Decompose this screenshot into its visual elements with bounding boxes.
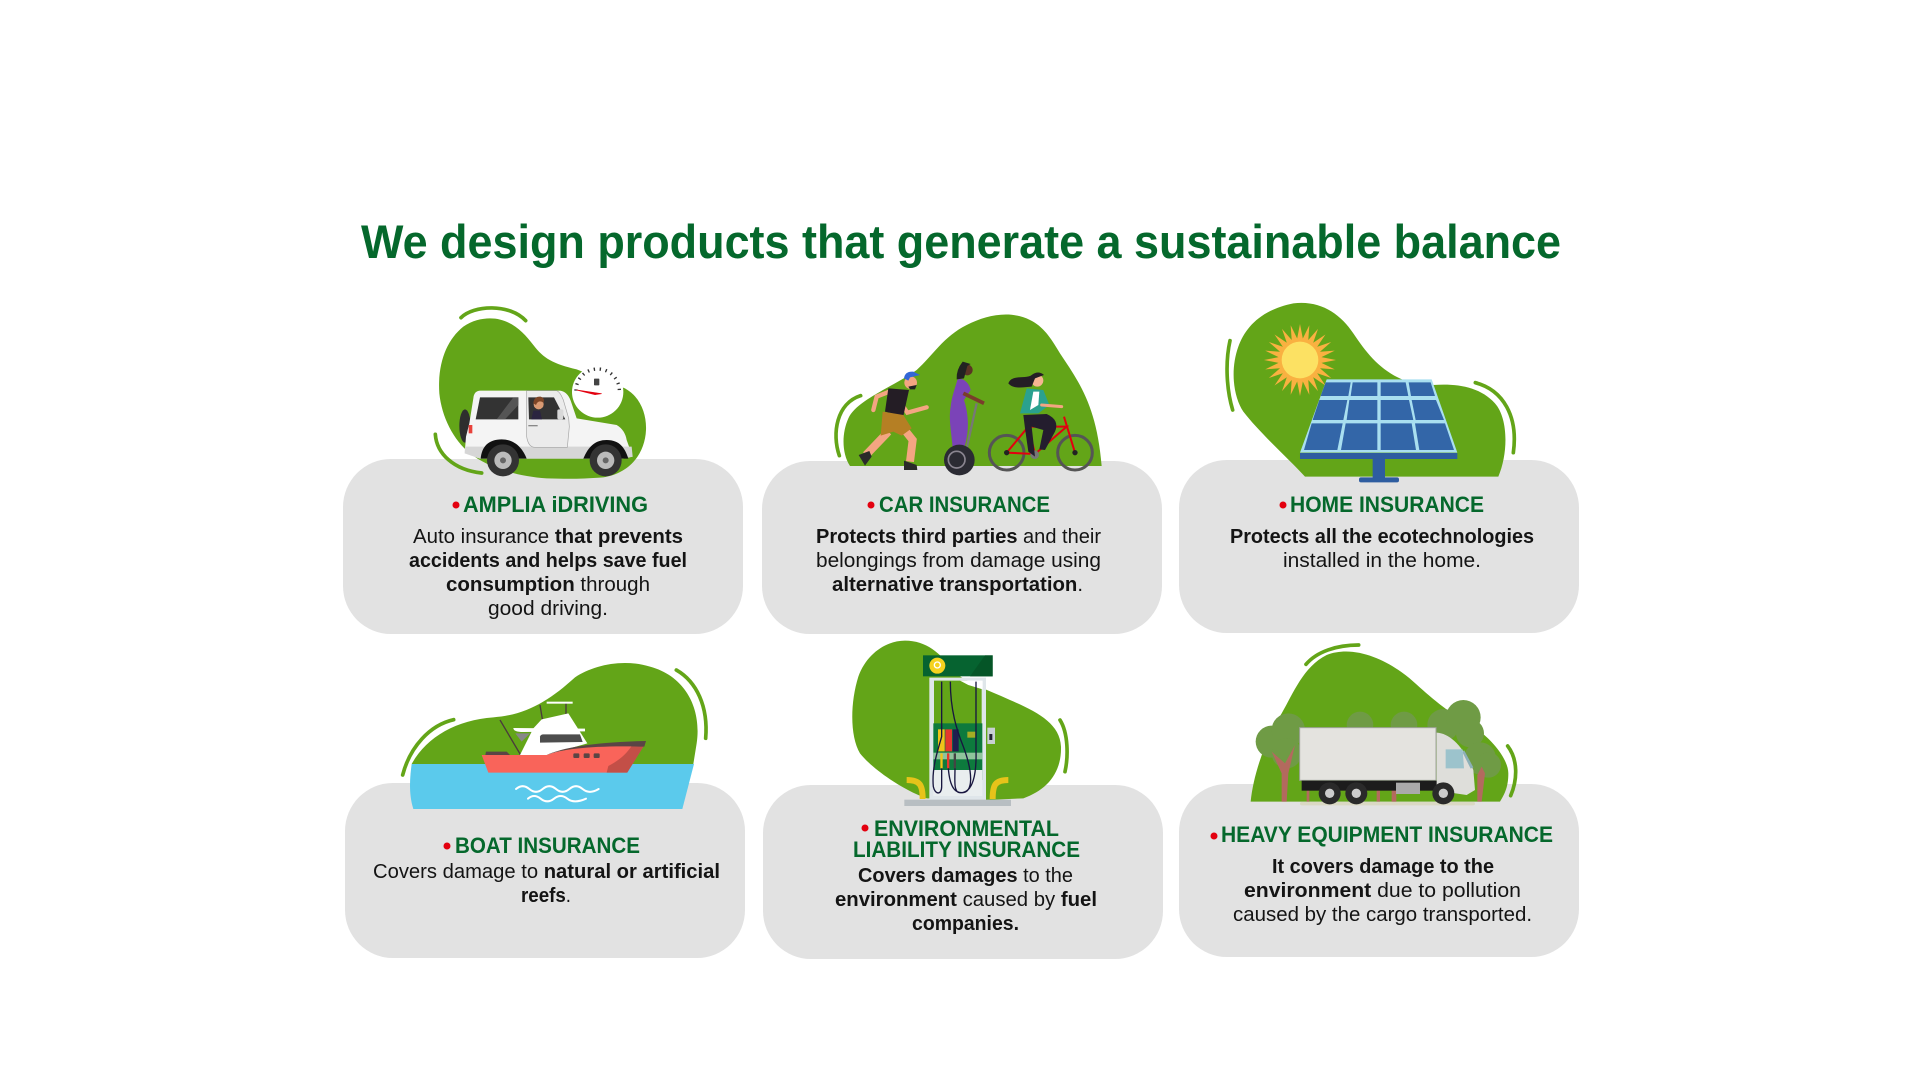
body text: [835, 865, 1097, 935]
heading: ENVIRONMENTAL LIABILITY INSURANCE: [853, 816, 1080, 862]
body text: consumption through: [446, 574, 650, 596]
body text: caused by the cargo transported.: [1233, 904, 1532, 926]
card background: [1179, 784, 1579, 957]
card background: [345, 783, 745, 958]
heading: BOAT INSURANCE: BOAT INSURANCE: [455, 833, 640, 858]
body text: It covers damage to the: [1272, 856, 1494, 878]
body text: Covers damages to the: [858, 865, 1073, 887]
panel: Car insurance: [762, 315, 1162, 634]
illustration: fuel pump: [852, 641, 1067, 806]
heading: CAR INSURANCE: CAR INSURANCE: [879, 492, 1050, 517]
card background: [763, 785, 1163, 959]
heading: HOME INSURANCE: HOME INSURANCE: [1290, 492, 1484, 517]
heading: ENVIRONMENTAL LIABILITY INSURANCE: LIABILITY INSURANCE: [853, 837, 1080, 862]
body text: [1233, 856, 1532, 926]
heading: AMPLIA iDRIVING: AMPLIA iDRIVING: [463, 492, 648, 517]
body text: belongings from damage using: [816, 550, 1101, 572]
body text: good driving.: [488, 598, 608, 620]
panel: Home insurance: [1179, 303, 1579, 633]
panel: Environmental liability insurance: [763, 641, 1163, 959]
body text: Protects all the ecotechnologies: [1230, 526, 1534, 548]
illustration: skater, segway rider and cyclist: [836, 315, 1102, 475]
illustration: truck and trees: [1251, 645, 1516, 805]
title: We design products that generate a sustainable balance: [361, 215, 1561, 268]
card background: [1179, 460, 1579, 633]
body text: installed in the home.: [1283, 550, 1481, 572]
card background: [343, 459, 743, 634]
heading: ENVIRONMENTAL LIABILITY INSURANCE: ENVIRONMENTAL: [874, 816, 1059, 841]
body text: [373, 861, 720, 907]
body text: companies.: [912, 913, 1019, 935]
body text: Protects third parties and their: [816, 526, 1101, 548]
body text: Covers damage to natural or artificial: [373, 861, 720, 883]
heading: HEAVY EQUIPMENT INSURANCE: HEAVY EQUIPMENT INSURANCE: [1221, 822, 1553, 847]
body text: environment caused by fuel: [835, 889, 1097, 911]
body text: [409, 526, 687, 620]
illustration: boat on water: [403, 663, 706, 809]
body text: reefs.: [521, 885, 571, 907]
body text: alternative transportation.: [832, 574, 1083, 596]
card background: [762, 461, 1162, 634]
body text: Auto insurance that prevents: [413, 526, 683, 548]
body text: environment due to pollution: [1244, 880, 1521, 902]
panel: Boat insurance: [345, 663, 745, 958]
panel: Amplia iDriving: [343, 308, 743, 634]
illustration: car and fuel gauge: [435, 308, 646, 479]
panel: Heavy equipment insurance: [1179, 645, 1579, 957]
body text: [1230, 526, 1534, 572]
body text: accidents and helps save fuel: [409, 550, 687, 572]
illustration: sun and solar panel: [1227, 303, 1514, 482]
body text: [816, 526, 1101, 596]
